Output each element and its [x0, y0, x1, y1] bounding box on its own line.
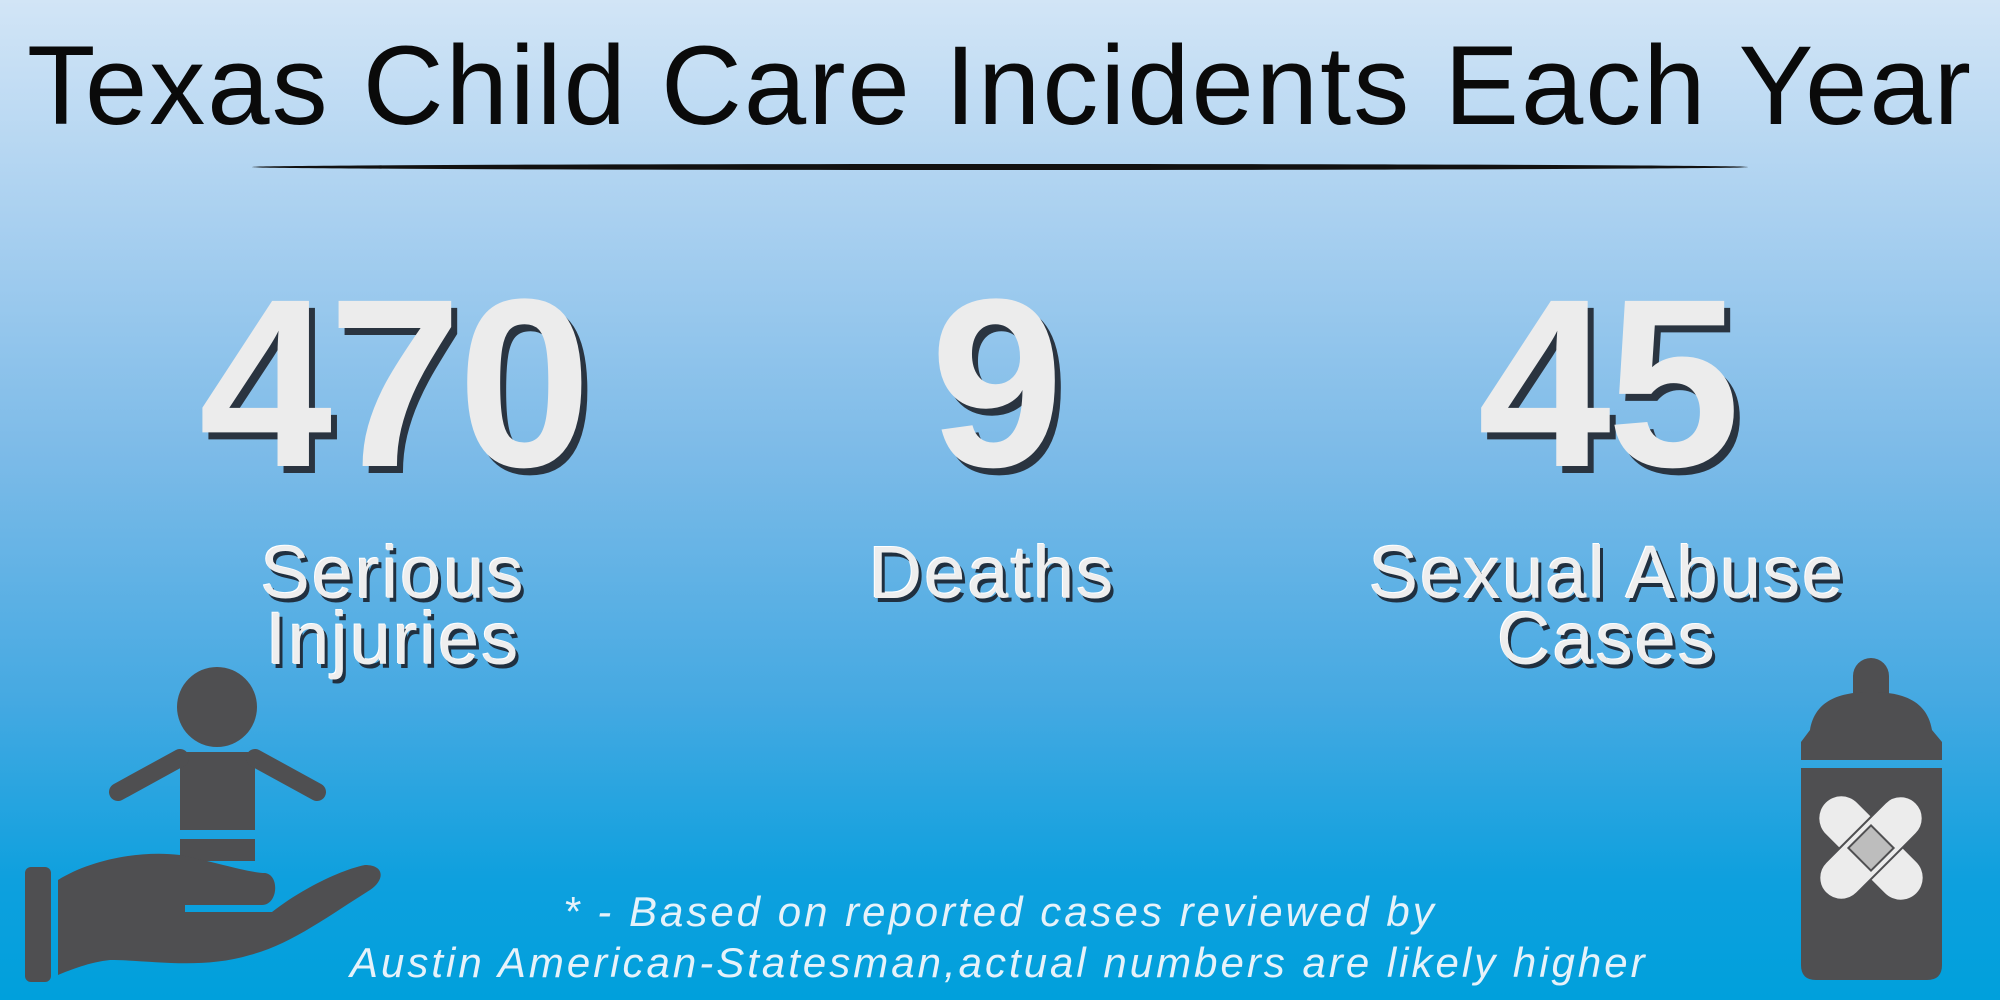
stat: serious injuries number: 470	[199, 249, 587, 517]
label: sexual abuse cases: Cases	[1497, 597, 1717, 680]
label: serious injuries	[261, 531, 525, 684]
footnote	[348, 888, 1648, 986]
footnote: * - Based on reported cases reviewed by	[563, 888, 1437, 935]
title: Texas Child Care Incidents Each Year	[27, 23, 1973, 148]
stat: sexual abuse number: 45	[1478, 249, 1736, 517]
icon: hand holding child	[25, 667, 381, 982]
label: deaths: Deaths	[869, 531, 1115, 614]
label: serious injuries: Serious	[261, 531, 525, 614]
icon: bottle with bandages	[1801, 658, 1942, 980]
label: sexual abuse cases: Sexual Abuse	[1369, 531, 1845, 614]
stat: deaths number: 9	[930, 249, 1060, 517]
label: sexual abuse cases	[1369, 531, 1845, 680]
label: serious injuries: Injuries	[266, 597, 520, 680]
footnote: Austin American-Statesman,actual numbers are likely higher	[350, 939, 1648, 986]
title underline	[252, 164, 1748, 170]
